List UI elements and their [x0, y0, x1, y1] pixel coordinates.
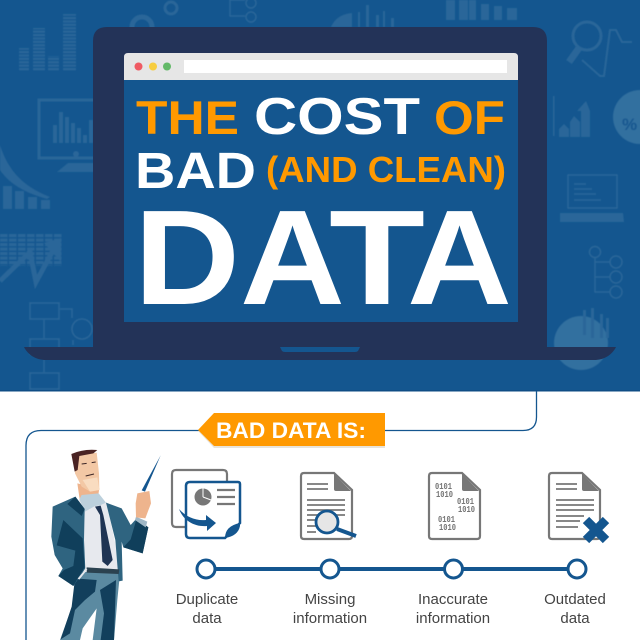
icon: grid with zigzag arrow — [0, 234, 62, 282]
title — [134, 88, 512, 333]
address bar — [184, 60, 507, 73]
belt — [87, 567, 119, 574]
label: duplicate data: data — [192, 610, 222, 627]
jacket left — [51, 497, 85, 586]
label: outdated data: data — [560, 610, 590, 627]
pocket highlight — [78, 568, 87, 580]
eyes and mouth — [82, 462, 96, 476]
label: missing information: information — [293, 610, 367, 627]
banner: bad data is — [198, 413, 385, 448]
title line 2 — [135, 142, 506, 199]
icon: duplicate data — [172, 470, 240, 538]
lapel — [67, 497, 85, 516]
label: outdated data: Outdated — [544, 591, 606, 608]
icon: missing information — [301, 473, 356, 539]
icon: tree diagram — [590, 246, 622, 298]
sleeve shadow — [123, 518, 148, 553]
icon: inaccurate information: 1010 — [439, 522, 456, 533]
header bottom rule — [0, 390, 640, 392]
icon: equalizer bars — [19, 14, 76, 71]
browser dots — [134, 62, 171, 70]
title line 1: COST — [254, 88, 420, 146]
icon: falling curve with bars — [0, 145, 50, 209]
head — [75, 453, 99, 492]
hand — [136, 491, 151, 518]
icon: inaccurate information: 0101 — [457, 496, 474, 507]
frame line — [26, 391, 536, 640]
hair — [71, 450, 97, 472]
title line 1 — [136, 88, 505, 146]
timeline — [197, 560, 586, 578]
neck — [77, 483, 99, 505]
trackpad notch — [280, 347, 360, 352]
icon: inaccurate information: 0101 — [438, 514, 455, 525]
laptop lid — [93, 27, 547, 347]
title line 3 — [134, 182, 512, 333]
title line 2: BAD — [135, 142, 256, 199]
trousers — [60, 572, 120, 640]
jacket shadow — [57, 520, 85, 586]
laptop base — [24, 347, 616, 360]
label: inaccurate information: Inaccurate — [418, 591, 488, 608]
title line 3: D — [134, 182, 240, 333]
icon: top bars — [446, 0, 517, 20]
collar — [79, 493, 106, 512]
label: duplicate data: Duplicate — [176, 591, 238, 608]
pointer — [142, 455, 161, 492]
title line 3: T — [329, 182, 425, 333]
icon: percent pie: % — [622, 115, 637, 134]
banner: bad data is: BAD DATA IS: — [216, 418, 366, 443]
laptop — [24, 27, 616, 360]
tie — [95, 506, 113, 566]
item icons — [172, 470, 606, 540]
shirt — [79, 500, 121, 569]
icon: outdated data — [549, 473, 606, 540]
icon: inaccurate information: 1010 — [436, 489, 453, 500]
label: inaccurate information: information — [416, 610, 490, 627]
title line 3: A — [240, 182, 345, 333]
title line 1: OF — [434, 91, 505, 144]
title line 2: (AND CLEAN) — [266, 149, 506, 190]
icon: small laptop — [560, 175, 624, 222]
icon: top pie and candles — [331, 5, 394, 27]
icon: gear cluster — [132, 2, 177, 37]
background data icons — [0, 0, 640, 389]
title line 1: THE — [136, 91, 239, 144]
icon: top tree — [230, 0, 256, 22]
illustration: businessman with pointer — [51, 450, 161, 640]
icon: bottom pie and candles — [554, 308, 609, 370]
icon: magnifier with wave — [569, 22, 632, 76]
icon: flowchart — [30, 303, 92, 389]
icon: monitor chart — [39, 100, 95, 172]
icon: inaccurate information: 0101 — [435, 481, 452, 492]
header background — [0, 0, 640, 391]
cuff — [135, 517, 147, 527]
icon: rising arrows — [553, 96, 590, 137]
title line 3: A — [407, 182, 512, 333]
label: missing information: Missing — [305, 591, 355, 608]
jacket right and arm — [106, 503, 148, 581]
item labels — [176, 591, 606, 627]
icon: percent pie — [613, 90, 640, 144]
screen — [124, 80, 518, 322]
browser bar — [124, 53, 518, 80]
icon: inaccurate information — [429, 473, 480, 539]
icon: inaccurate information: 1010 — [458, 504, 475, 515]
